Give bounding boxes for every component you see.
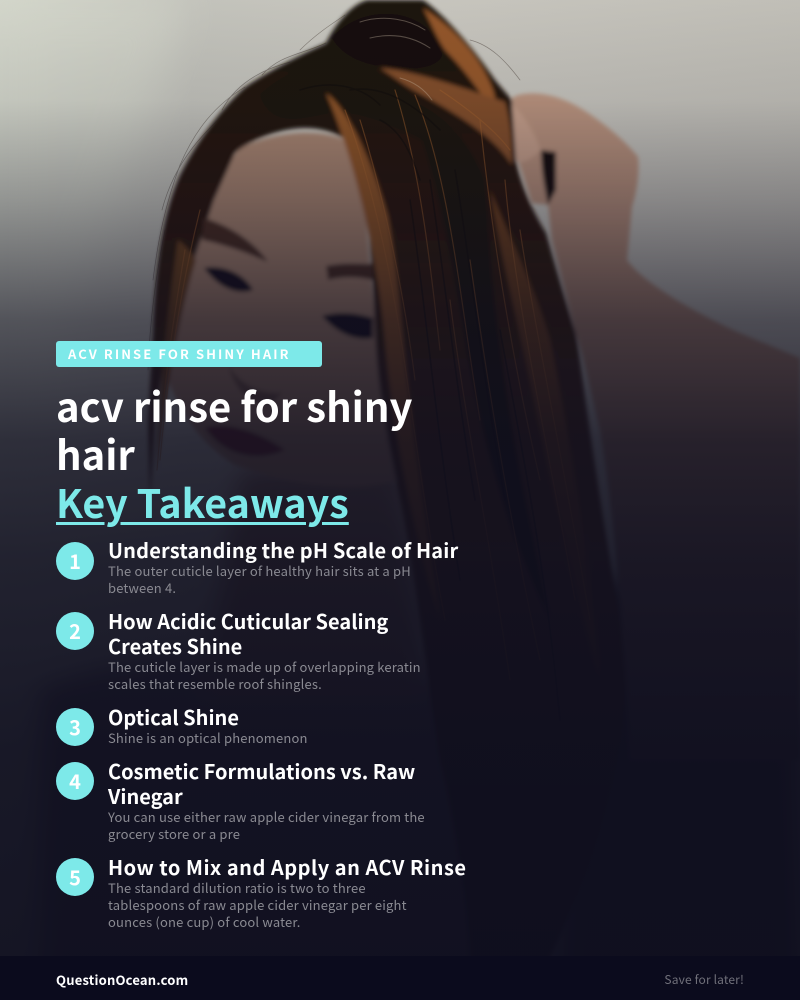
crown dark core — [332, 14, 443, 69]
hair strands — [148, 15, 590, 720]
number badge 3: 3 — [69, 712, 81, 741]
takeaway 3 description: Shine is an optical phenomenon — [108, 728, 308, 747]
takeaway 4 heading: Cosmetic Formulations vs. Raw — [108, 756, 415, 785]
title: acv rinse for shiny — [56, 376, 412, 434]
category badge: ACV RINSE FOR SHINY HAIR — [68, 344, 291, 363]
takeaway 3 — [56, 702, 308, 747]
lips — [205, 425, 285, 456]
takeaway 4 heading — [108, 756, 415, 810]
takeaway 4 description — [108, 807, 425, 843]
takeaway 2 heading: How Acidic Cuticular Sealing — [108, 606, 388, 635]
brand name: QuestionOcean.com — [56, 970, 188, 989]
face — [160, 133, 400, 487]
takeaway 3 heading: Optical Shine — [108, 702, 239, 731]
nose shadow — [228, 365, 282, 405]
takeaway 5 description: tablespoons of raw apple cider vinegar per eight — [108, 895, 407, 914]
category badge — [56, 341, 322, 367]
takeaway 4 description: You can use either raw apple cider vinegar from the — [108, 807, 425, 826]
takeaway 1 description: The outer cuticle layer of healthy hair sits at a pH — [108, 561, 411, 580]
takeaway 2 — [56, 606, 421, 693]
number badge 2: 2 — [69, 616, 81, 645]
footer bar — [0, 956, 800, 1000]
number badge 5 — [56, 858, 94, 896]
takeaway 5 description: The standard dilution ratio is two to three — [108, 878, 366, 897]
save prompt: Save for later! — [664, 971, 744, 988]
takeaway 2 description: The cuticle layer is made up of overlapping keratin — [108, 657, 421, 676]
takeaway 1 description — [108, 561, 411, 597]
takeaway 4 heading: Vinegar — [108, 781, 183, 810]
hair mass — [148, 0, 626, 1000]
number badge 5: 5 — [69, 862, 81, 891]
takeaway 2 heading: Creates Shine — [108, 631, 242, 660]
takeaway 4 description: grocery store or a pre — [108, 824, 240, 843]
takeaway 5 description: ounces (one cup) of cool water. — [108, 912, 301, 931]
orange front strand — [326, 93, 440, 620]
orange crescent on crown — [423, 8, 505, 135]
number badge 4: 4 — [69, 766, 81, 795]
takeaway 5 description — [108, 878, 407, 931]
number badge 3 — [56, 708, 94, 746]
takeaway 1 — [56, 535, 458, 597]
number badge 2 — [56, 612, 94, 650]
takeaway 5 — [56, 852, 466, 931]
dark central hair — [408, 100, 550, 620]
takeaway 1 description: between 4. — [108, 578, 176, 597]
eyebrows — [202, 218, 268, 262]
takeaway 4 — [56, 756, 425, 843]
takeaway 5 heading: How to Mix and Apply an ACV Rinse — [108, 852, 466, 881]
arm and hand — [512, 93, 800, 760]
takeaway 1 heading: Understanding the pH Scale of Hair — [108, 535, 458, 564]
takeaway 2 description — [108, 657, 421, 693]
neck and body — [40, 656, 490, 1000]
title — [56, 376, 412, 482]
eyes — [204, 267, 253, 292]
number badge 1: 1 — [69, 546, 81, 575]
takeaway 2 heading — [108, 606, 388, 660]
title: hair — [56, 424, 135, 482]
subtitle: Key Takeaways: Key Takeaways — [56, 473, 349, 530]
number badge 4 — [56, 762, 94, 800]
brown side hair — [490, 190, 600, 680]
takeaway 2 description: scales that resemble roof shingles. — [108, 674, 322, 693]
number badge 1 — [56, 542, 94, 580]
